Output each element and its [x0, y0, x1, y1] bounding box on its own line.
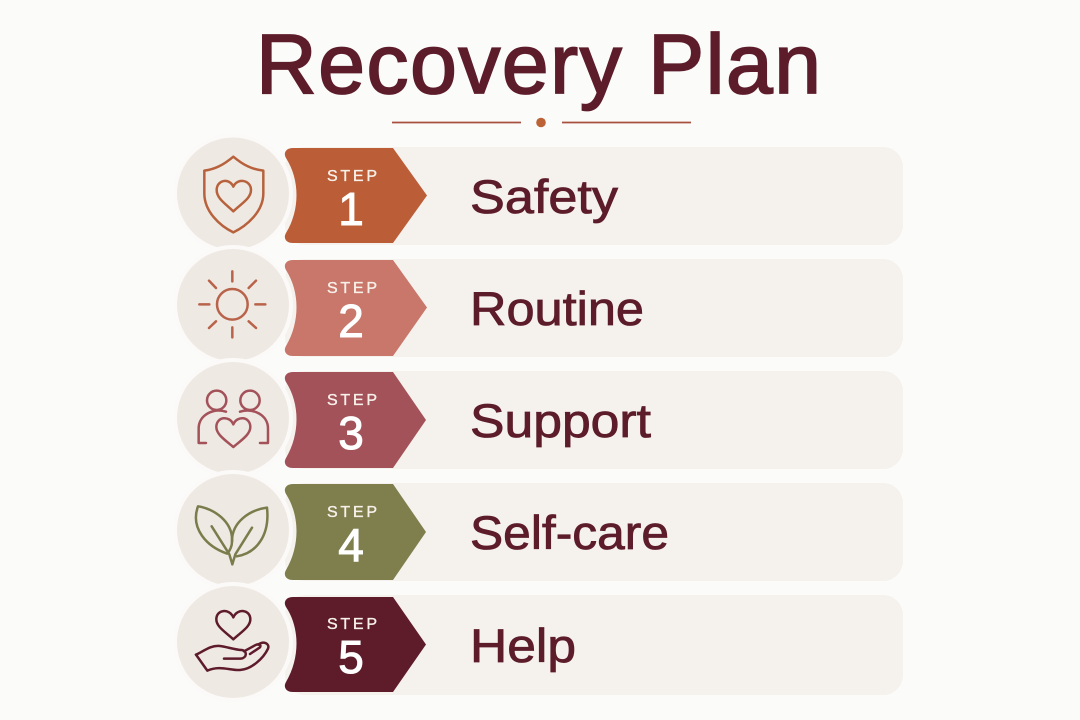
title divider	[392, 118, 691, 127]
step number 4: 4	[338, 519, 364, 571]
step number 2: 2	[338, 295, 364, 347]
label: Help: Help	[470, 619, 576, 672]
panel: Support	[285, 371, 903, 469]
icon circle: shield	[173, 134, 293, 254]
step label 1: STEP	[327, 168, 377, 185]
panel: Routine	[285, 259, 903, 357]
panel: Help	[285, 595, 903, 695]
step label 4: STEP	[327, 504, 377, 521]
icon circle: sun	[173, 245, 293, 365]
row 3: Support	[173, 358, 903, 478]
label: Support: Support	[470, 394, 651, 447]
chevron: step 3	[285, 372, 426, 468]
step number 5: 5	[338, 631, 364, 683]
label: Self-care: Self-care	[470, 506, 669, 559]
row 5: Help	[173, 582, 903, 702]
row 1: Safety	[173, 134, 903, 254]
icon: shield with heart	[204, 157, 263, 232]
chevron: step 2	[285, 260, 427, 356]
row 2: Routine	[173, 245, 903, 365]
label: Safety: Safety	[470, 170, 619, 223]
icon: leaves	[196, 506, 267, 564]
label: Routine: Routine	[470, 282, 644, 335]
chevron: step 4	[285, 484, 426, 580]
icon: hand holding heart	[196, 611, 268, 671]
step number 1: 1	[338, 183, 364, 235]
row 4: Self-care	[173, 470, 903, 590]
step label 3: STEP	[327, 392, 377, 409]
step label 5: STEP	[327, 616, 377, 633]
panel: Safety	[285, 147, 903, 245]
icon circle: hand	[173, 582, 293, 702]
icon: sun	[199, 271, 265, 337]
title: Recovery Plan	[256, 17, 821, 111]
panel: Self-care	[285, 483, 903, 581]
chevron: step 5	[285, 597, 426, 692]
icon circle: people	[173, 358, 293, 478]
chevron: step 1	[285, 148, 427, 243]
step number 3: 3	[338, 407, 364, 459]
step label 2: STEP	[327, 280, 377, 297]
icon circle: leaves	[173, 470, 293, 590]
icon: two people with heart	[199, 391, 268, 447]
